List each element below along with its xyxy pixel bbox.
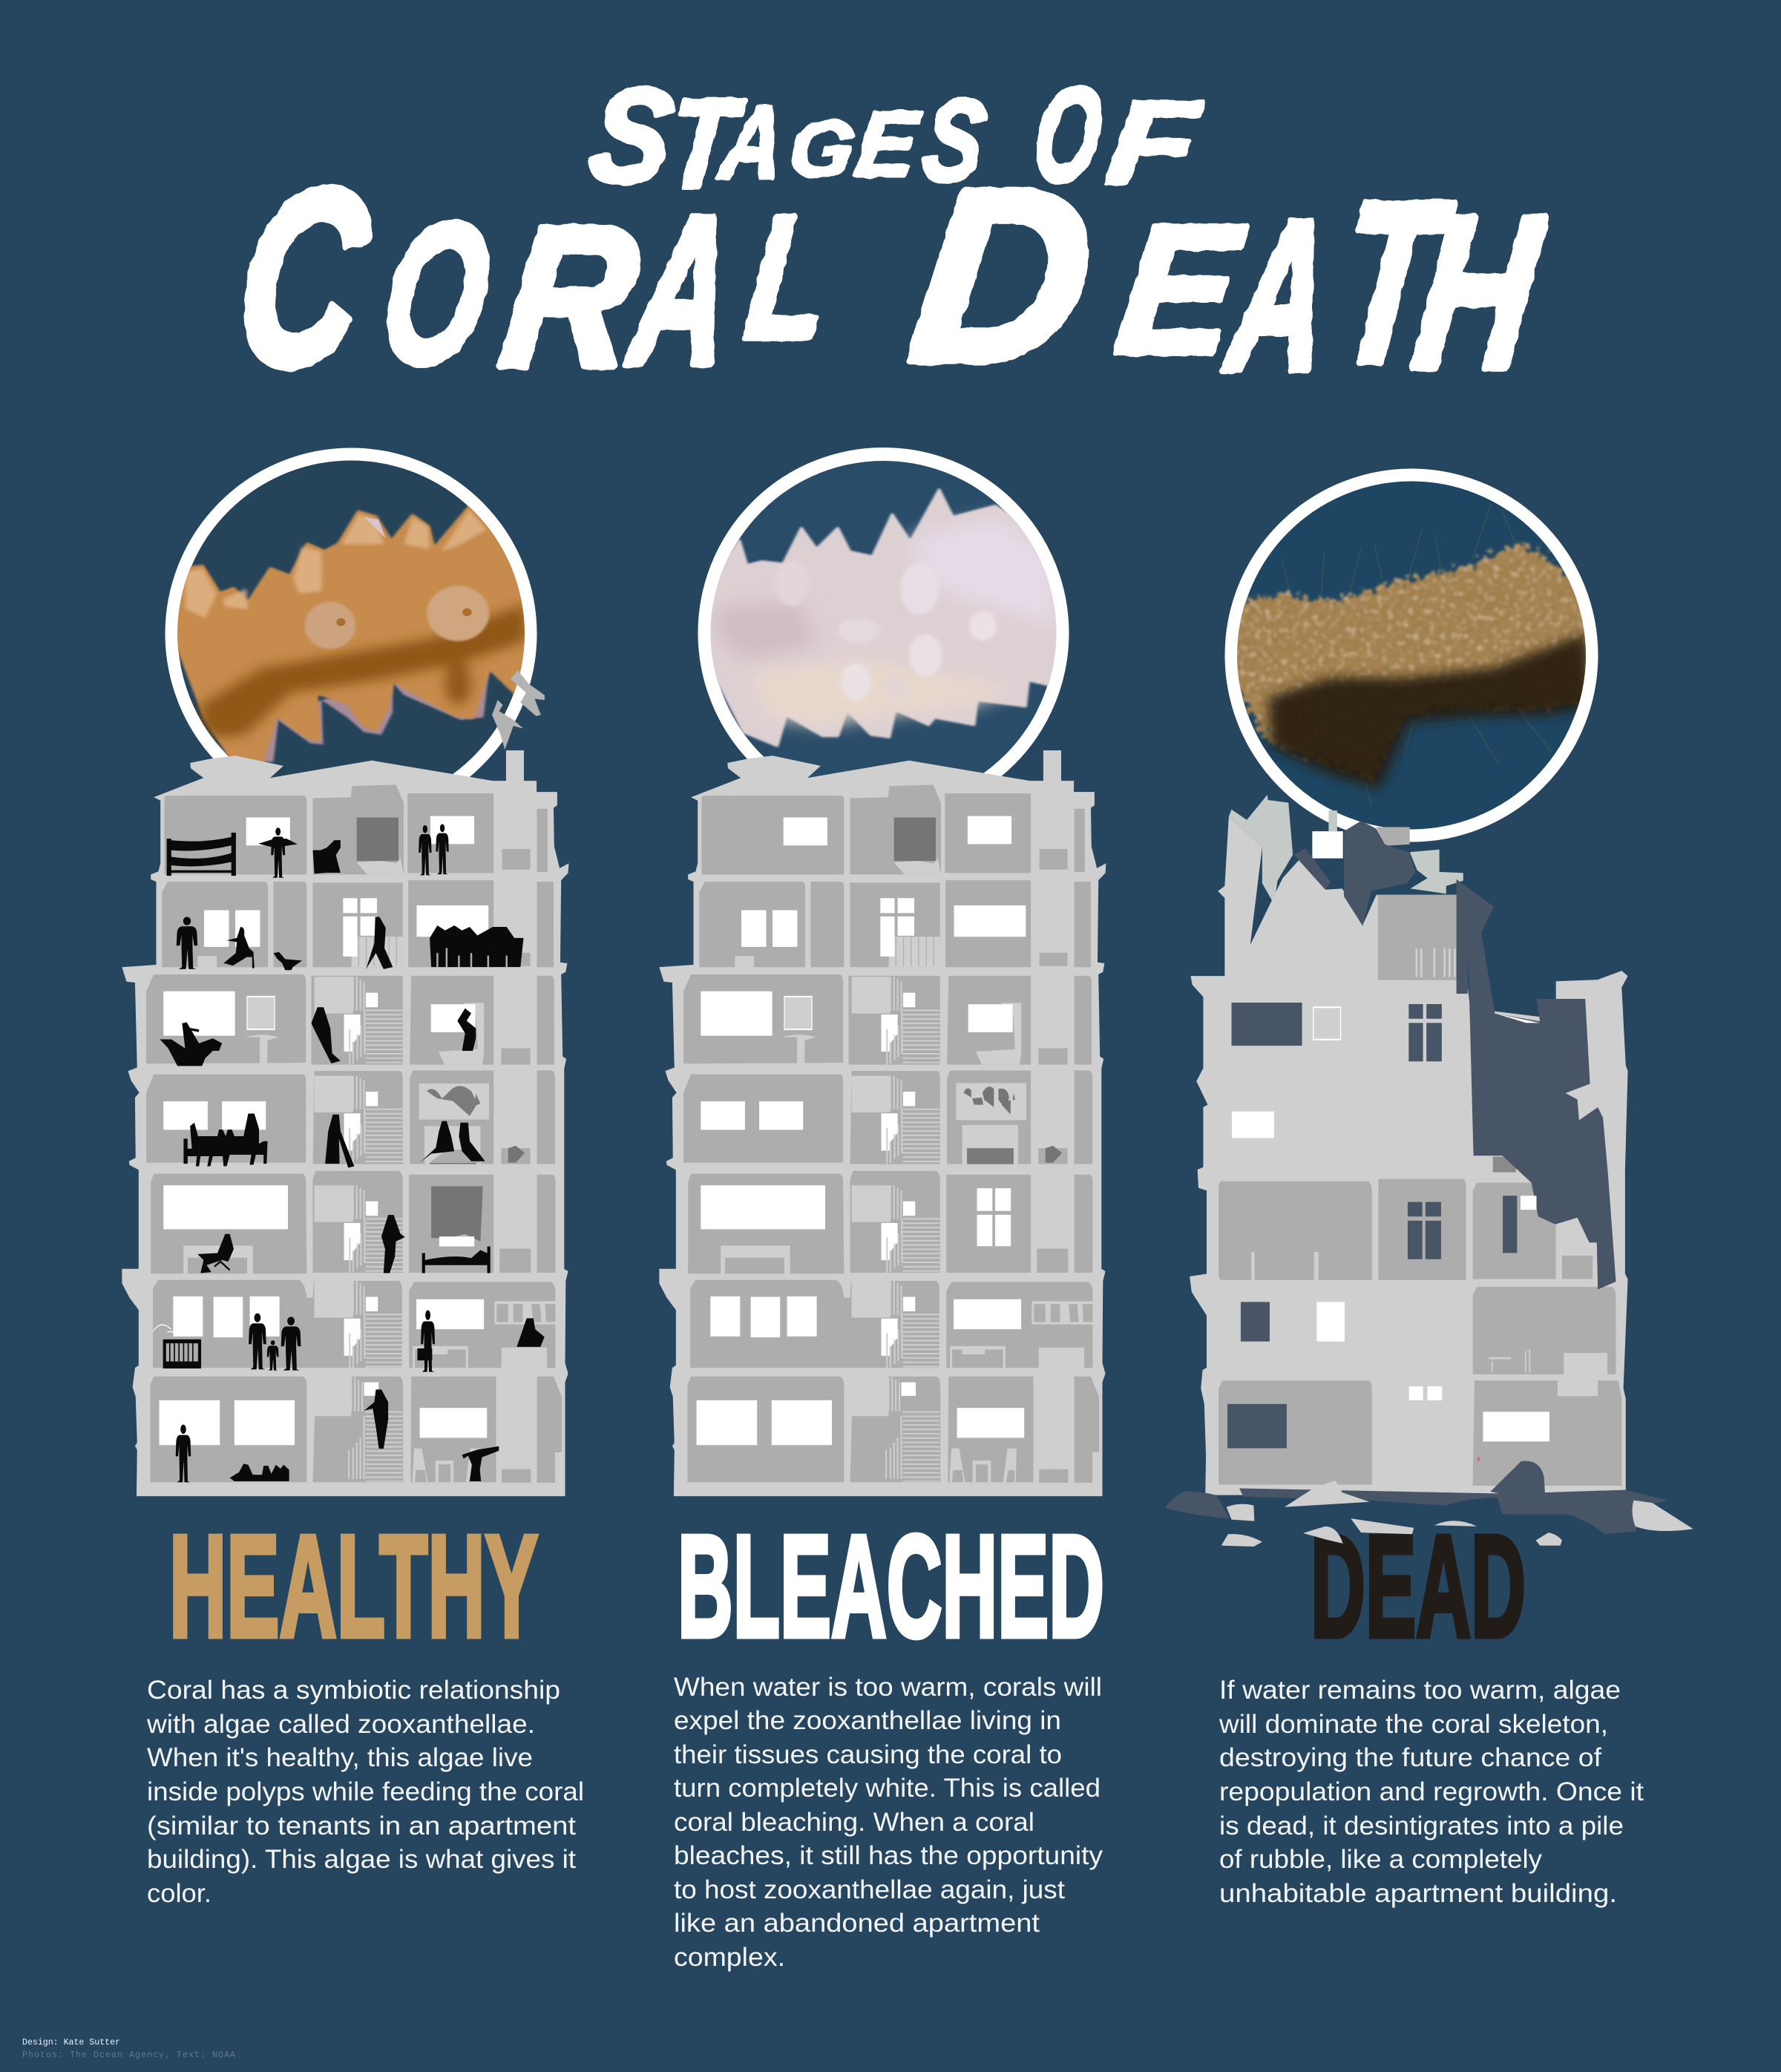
tenants silhouettes: [153, 824, 545, 1482]
text: healthy description: color.: [147, 1879, 211, 1908]
dark underside: [1268, 633, 1592, 789]
coral photo: bleached: [705, 454, 1063, 812]
title line: Stages Of: [583, 60, 1207, 214]
credits: Photos: The Ocean Agency, Text: NOAA: [22, 2050, 235, 2060]
icon: grey coral fragment: [492, 670, 545, 750]
text: dead description: destroying the future chance of: [1219, 1743, 1601, 1772]
text: healthy description: When it's healthy, this algae live: [147, 1743, 533, 1772]
title line: Coral Death: A: [1216, 176, 1342, 415]
text: bleached description: coral bleaching. When a coral: [674, 1808, 1034, 1837]
title line: Coral Death: O: [372, 183, 500, 405]
title line: Stages Of: T: [660, 73, 750, 214]
building: bleached apartment: [659, 750, 1106, 1496]
text: bleached description: When water is too warm, corals will: [674, 1673, 1102, 1702]
title line: Stages Of: G: [784, 105, 859, 194]
windows: [1227, 1003, 1517, 1448]
text: bleached description: like an abandoned apartment: [674, 1909, 1040, 1938]
rubble: [1165, 1461, 1693, 1547]
heading: dead: DEAD: [1311, 1505, 1526, 1668]
text: bleached description: turn completely white. This is called: [674, 1774, 1101, 1803]
text: healthy description: with algae called zooxanthellae.: [146, 1710, 535, 1739]
text: dead description: unhabitable apartment building.: [1219, 1879, 1617, 1908]
title line: Stages Of: S: [917, 75, 991, 206]
text: dead description: will dominate the coral skeleton,: [1219, 1710, 1608, 1739]
text: dead description: If water remains too warm, algae: [1219, 1676, 1621, 1705]
text: healthy description: (similar to tenants in an apartment: [147, 1812, 576, 1840]
shell: [1190, 817, 1628, 1495]
title line: Coral Death: D: [900, 140, 1106, 413]
text: bleached description: their tissues causing the coral to: [674, 1740, 1062, 1769]
title line: Stages Of: A: [714, 85, 790, 200]
text: healthy description: Coral has a symbiotic relationship: [147, 1676, 560, 1705]
text: bleached description: [674, 1673, 1103, 1972]
title line: Coral Death: [225, 138, 1554, 416]
text: dead description: is dead, it desintigrates into a pile: [1219, 1812, 1624, 1840]
title line: Coral Death: H: [1404, 171, 1554, 413]
heading: bleached: BLEACHED: [678, 1505, 1104, 1668]
title line: Stages Of: S: [583, 62, 680, 211]
text: dead description: repopulation and regrowth. Once it: [1219, 1777, 1644, 1806]
title line: Coral Death: L: [738, 180, 841, 376]
text: bleached description: expel the zooxanthellae living in: [674, 1706, 1061, 1735]
coral photo: healthy: [171, 454, 531, 813]
rooms: [1219, 895, 1621, 1486]
title line: Coral Death: T: [1326, 154, 1462, 410]
heading: healthy: HEALTHY: [169, 1505, 538, 1668]
text: healthy description: [146, 1676, 584, 1908]
credits: [22, 2038, 235, 2060]
title line: Coral Death: A: [619, 173, 744, 409]
building: healthy apartment with tenants: [122, 670, 568, 1496]
title line: Stages Of: O: [1026, 60, 1109, 209]
text: bleached description: bleaches, it still has the opportunity: [674, 1841, 1103, 1870]
title line: Stages Of: F: [1101, 78, 1207, 209]
title: [225, 60, 1554, 416]
text: healthy description: building). This algae is what gives it: [147, 1845, 576, 1874]
text: dead description: of rubble, like a completely: [1219, 1845, 1543, 1874]
title line: Coral Death: R: [492, 186, 648, 409]
title line: Stages Of: E: [851, 92, 925, 196]
algae hairs: [1281, 505, 1552, 806]
building: dead collapsed apartment: [1165, 795, 1693, 1547]
coral photo: dead: [1231, 475, 1592, 836]
title line: Coral Death: E: [1109, 188, 1252, 391]
dark shading: [197, 603, 526, 737]
text: healthy description: inside polyps while feeding the coral: [147, 1777, 584, 1806]
text: bleached description: to host zooxanthellae again, just: [674, 1875, 1065, 1904]
text: dead description: [1219, 1676, 1644, 1908]
pale debris: [1229, 795, 1463, 904]
text: bleached description: complex.: [674, 1943, 785, 1972]
credits: Design: Kate Sutter: [22, 2038, 120, 2048]
title line: Coral Death: C: [225, 138, 382, 416]
dark collapse shards: [1294, 821, 1616, 1289]
